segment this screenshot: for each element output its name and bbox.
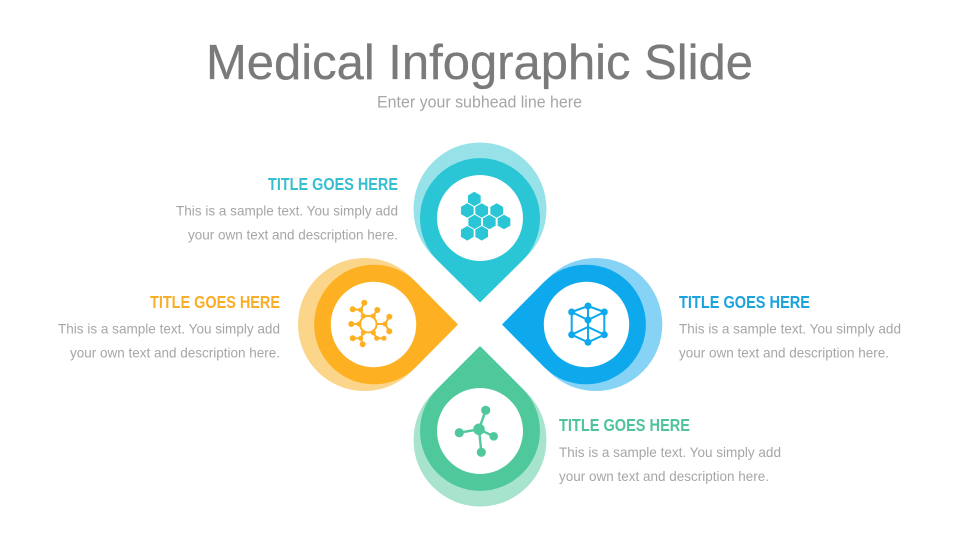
text block: blue: TITLE GOES HERE [679,292,810,312]
pin: orange left [298,258,458,391]
text block: teal [176,174,398,242]
title: Medical Infographic Slide [206,35,753,90]
icon: cube network [568,302,608,346]
icon: molecule [455,406,498,457]
text block: blue: This is a sample text. You simply add [679,320,901,336]
text block: blue: your own text and description here. [679,344,889,360]
text block: green: This is a sample text. You simply add [559,444,781,460]
text block: teal: TITLE GOES HERE [268,174,398,194]
subhead: Enter your subhead line here [377,92,582,112]
text block: green: your own text and description here. [559,468,769,484]
text block: teal: This is a sample text. You simply add [176,202,398,218]
text block: orange: This is a sample text. You simply add [58,320,280,336]
pin: green bottom [414,346,546,506]
pin: blue right [502,258,662,391]
text block: green: TITLE GOES HERE [559,415,690,435]
text block: orange: your own text and description here. [70,344,280,360]
text block: teal: your own text and description here. [188,226,398,242]
icon: molecule ring [348,300,392,347]
text block: blue [679,292,901,360]
pin: teal top [414,142,546,302]
text block: green [559,415,781,484]
icon: honeycomb [460,191,511,241]
text block: orange: TITLE GOES HERE [150,292,280,312]
text block: orange [58,292,280,360]
